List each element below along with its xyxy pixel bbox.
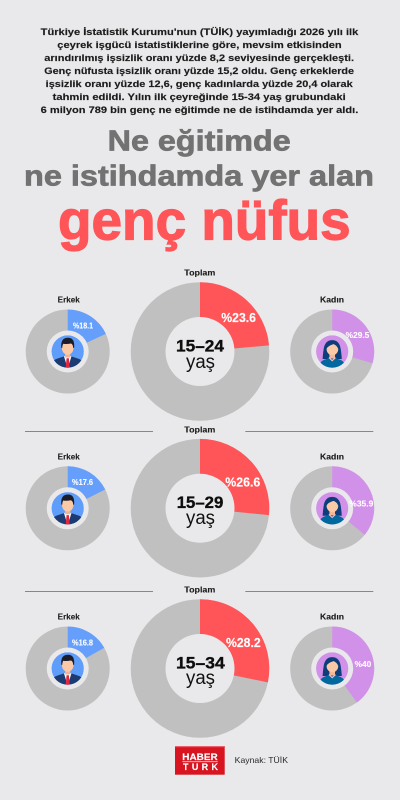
panel: 15-24 yaş xyxy=(26,269,374,421)
intro text block: tahmin edildi. Yılın ilk çeyreğinde 15-34 yaş grubundaki xyxy=(53,92,346,102)
donut: erkek 18.1 xyxy=(26,310,110,394)
donut: kadın 29.5 xyxy=(290,310,374,394)
intro text block: Genç nüfusta işsizlik oranı yüzde 15,2 oldu. Genç erkeklerde xyxy=(44,66,354,76)
label: erkek: Erkek xyxy=(58,613,80,622)
donut: toplam 23.6 xyxy=(131,282,269,421)
donut: erkek 16.8 xyxy=(26,626,110,710)
divider line left xyxy=(25,430,153,433)
donut: toplam 28.2: %28.2 xyxy=(226,635,261,650)
label: erkek: Erkek xyxy=(58,295,80,304)
title: Ne eğitimde xyxy=(108,126,291,158)
donut: kadın 29.5: %29.5 xyxy=(346,331,370,340)
label: erkek: Erkek xyxy=(58,452,80,461)
logo: Haber Türk: TURK xyxy=(183,762,218,772)
title: genç nüfus xyxy=(58,188,351,251)
panel: 15-34 yaş xyxy=(26,586,374,738)
donut: toplam 26.6: yaş xyxy=(186,508,215,529)
intro text block: 6 milyon 789 bin genç ne eğitimde ne de istihdamda yer aldı. xyxy=(41,105,358,115)
donut: toplam 26.6: %26.6 xyxy=(225,474,260,489)
donut: erkek 16.8: %16.8 xyxy=(72,638,94,647)
source: Kaynak: TÜİK xyxy=(235,755,288,765)
logo: Haber Türk xyxy=(175,746,225,775)
donut: erkek 17.6 xyxy=(26,466,110,550)
label: toplam: Toplam xyxy=(184,586,215,595)
label: kadın: Kadın xyxy=(320,452,344,461)
title xyxy=(24,126,374,251)
donut: toplam 26.6: 15–29 xyxy=(177,493,223,512)
donut: toplam 23.6: 15–24 xyxy=(176,337,225,356)
donut: kadın 40: %40 xyxy=(355,660,372,669)
intro text block: Türkiye İstatistik Kurumu'nun (TÜİK) yayımladığı 2026 yılı ilk xyxy=(41,27,359,37)
label: kadın: Kadın xyxy=(320,295,344,304)
panel: 15-29 yaş xyxy=(26,426,374,578)
divider line right xyxy=(245,590,373,593)
intro text block xyxy=(41,27,359,115)
donut: toplam 26.6 xyxy=(131,439,269,578)
donut: kadın 35.9 xyxy=(290,466,374,550)
donut: kadın 40 xyxy=(290,626,374,710)
donut: toplam 28.2: 15–34 xyxy=(176,653,225,672)
intro text block: çeyrek işgücü istatistiklerine göre, mevsim etkisinden xyxy=(57,40,342,50)
title: ne istihdamda yer alan xyxy=(24,160,374,192)
divider line right xyxy=(245,430,373,433)
donut: toplam 23.6: %23.6 xyxy=(221,310,256,325)
donut: toplam 28.2 xyxy=(131,599,269,738)
intro text block: işsizlik oranı yüzde 12,6, genç kadınlarda yüzde 20,4 olarak xyxy=(46,79,354,89)
donut: toplam 23.6: yaş xyxy=(186,352,215,373)
label: toplam: Toplam xyxy=(184,426,215,435)
label: toplam: Toplam xyxy=(184,269,215,278)
logo: Haber Türk: HABER xyxy=(182,752,218,762)
intro text block: arındırılmış işsizlik oranı yüzde 8,2 seviyesinde gerçekleşti. xyxy=(44,53,354,63)
donut: kadın 35.9: %35.9 xyxy=(349,500,374,509)
donut: erkek 18.1: %18.1 xyxy=(73,321,93,330)
label: kadın: Kadın xyxy=(320,613,344,622)
donut: erkek 17.6: %17.6 xyxy=(72,478,94,487)
donut: toplam 28.2: yaş xyxy=(186,668,215,689)
divider line left xyxy=(25,590,153,593)
